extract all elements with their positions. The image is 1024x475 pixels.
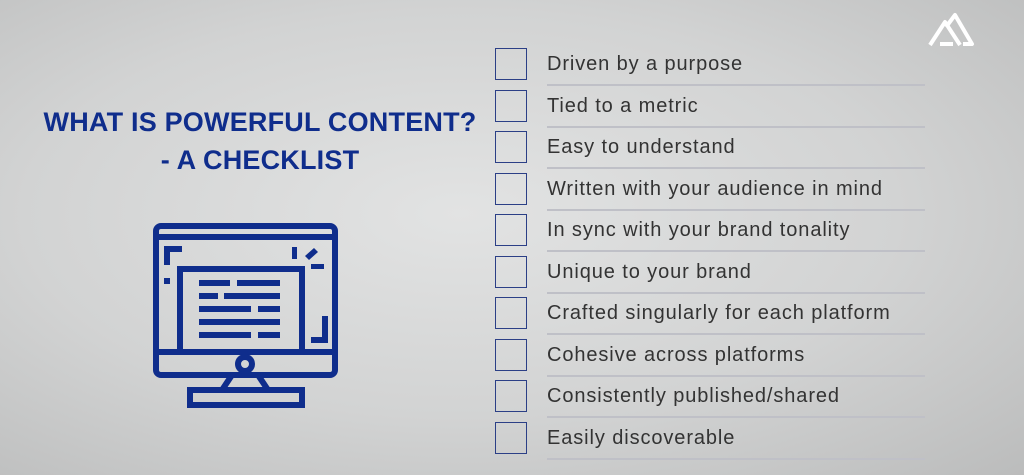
title: - A CHECKLIST [161, 145, 359, 175]
text: In sync with your brand tonality [547, 219, 850, 241]
title [44, 107, 476, 175]
text: Easily discoverable [547, 427, 735, 449]
text: Written with your audience in mind [547, 178, 883, 200]
checklist [495, 48, 925, 460]
text: Tied to a metric [547, 95, 698, 117]
text: Crafted singularly for each platform [547, 302, 891, 324]
text: Unique to your brand [547, 261, 752, 283]
text: Easy to understand [547, 136, 736, 158]
text: Driven by a purpose [547, 53, 743, 75]
text: Cohesive across platforms [547, 344, 805, 366]
logo [930, 15, 972, 45]
title: WHAT IS POWERFUL CONTENT? [44, 107, 476, 137]
text: Consistently published/shared [547, 385, 840, 407]
